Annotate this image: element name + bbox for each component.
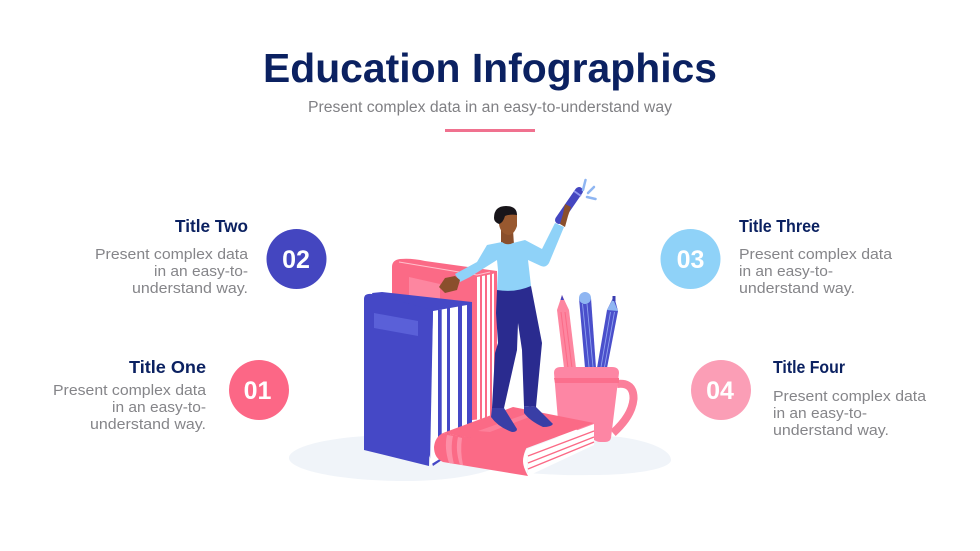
- hair: [494, 206, 517, 224]
- text block: Title Three description: Present complex data: [739, 246, 893, 263]
- item: Title Four: [691, 357, 927, 439]
- mug body: [554, 367, 619, 442]
- text block: Title Two description: Present complex data: [95, 246, 249, 263]
- heading: Title Four: Title Four: [773, 357, 845, 377]
- sweater and arms: [455, 223, 564, 291]
- left hand: [439, 276, 460, 293]
- text block: Title Four description: Present complex data: [773, 388, 927, 405]
- item: Title Three: [660, 216, 893, 297]
- mug handle: [613, 384, 634, 433]
- text block: Title One description: in an easy-to-: [112, 399, 206, 416]
- subtitle: Present complex data in an easy-to-understand way: [308, 99, 672, 116]
- illustration: student on books: [289, 180, 671, 481]
- number badge 01: [229, 360, 289, 420]
- trousers: [492, 286, 542, 408]
- text block: Title Three description: [739, 246, 893, 297]
- text block: Title Four description: understand way.: [773, 422, 889, 439]
- marker sparks: [583, 180, 596, 199]
- number badge 02: 02: [282, 246, 310, 274]
- title: Education Infographics: [263, 45, 717, 91]
- pink lying book: [434, 407, 594, 476]
- text block: Title Two description: understand way.: [132, 280, 248, 297]
- text block: Title Four description: in an easy-to-: [773, 405, 867, 422]
- marker: [559, 191, 579, 220]
- student figure: [439, 180, 596, 432]
- number badge 04: 04: [706, 377, 734, 405]
- text block: Title Two description: [95, 246, 249, 297]
- text block: Title Four description: [773, 388, 927, 439]
- shoes: [491, 406, 553, 432]
- neck: [501, 230, 514, 247]
- heading: Title Two: Title Two: [175, 216, 248, 236]
- item: Title One: [53, 357, 289, 433]
- raised hand: [560, 204, 571, 227]
- number badge 04: [691, 360, 751, 420]
- blue round pencil: [579, 292, 596, 368]
- pink pencil: [557, 295, 576, 368]
- text block: Title One description: [53, 382, 207, 433]
- item: Title Two: [95, 216, 326, 297]
- text block: Title Three description: understand way.: [739, 280, 855, 297]
- accent underline: [445, 129, 535, 132]
- number badge 01: 01: [244, 377, 271, 405]
- text block: Title Two description: in an easy-to-: [154, 263, 248, 280]
- number badge 03: 03: [677, 246, 704, 274]
- face: [499, 214, 517, 235]
- blue sharp pencil: [597, 296, 618, 368]
- text block: Title Three description: in an easy-to-: [739, 263, 833, 280]
- ground shadow: [289, 435, 671, 481]
- pink standing book: [392, 259, 497, 430]
- heading: Title Three: Title Three: [739, 216, 820, 236]
- text block: Title One description: Present complex data: [53, 382, 207, 399]
- number badge 03: [660, 229, 720, 289]
- blue standing book: [364, 292, 472, 466]
- number badge 02: [266, 229, 326, 289]
- mug with pencils: [554, 292, 634, 442]
- heading: Title One: Title One: [129, 357, 206, 377]
- text block: Title One description: understand way.: [90, 416, 206, 433]
